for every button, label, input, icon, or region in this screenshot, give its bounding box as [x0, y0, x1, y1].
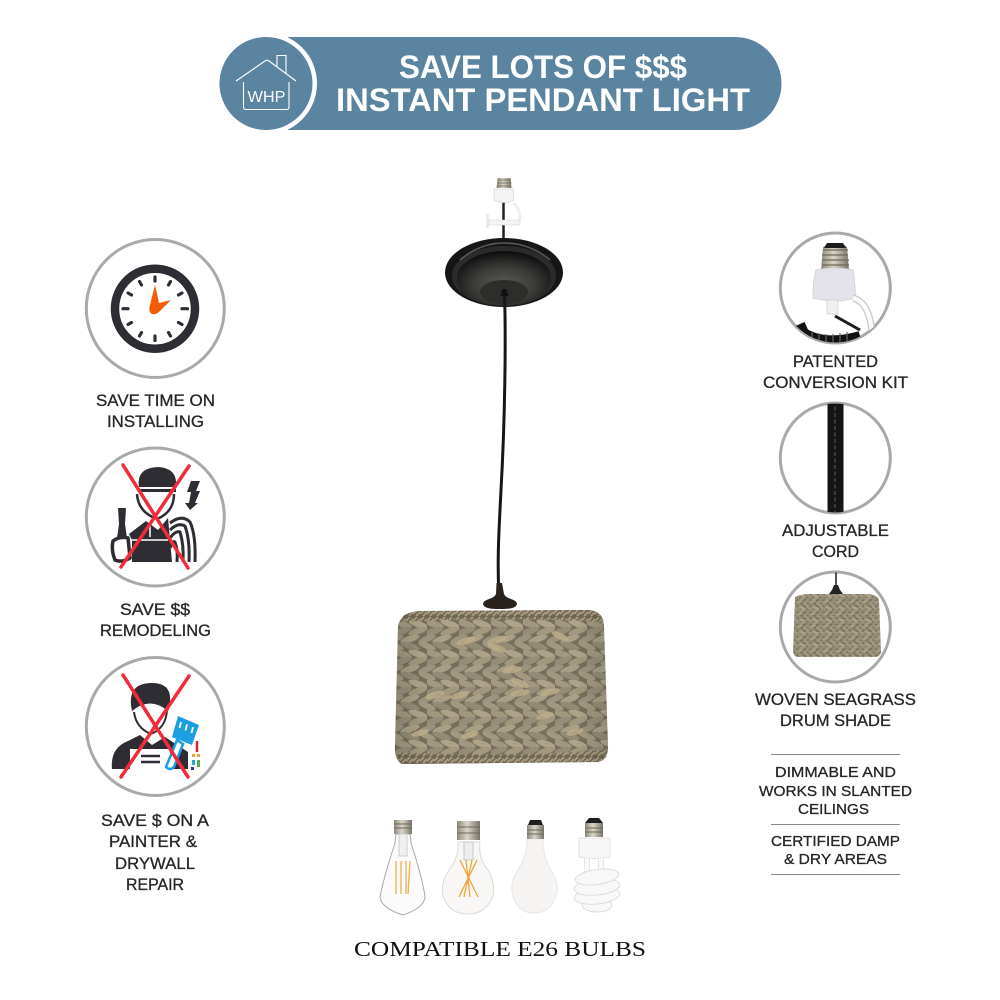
label: [100, 601, 211, 640]
bulb: A19 filament: [442, 821, 494, 914]
benefit: save time on installing: [86, 240, 224, 431]
label: SAVE $ ON A: [101, 812, 209, 830]
label: DRUM SHADE: [780, 712, 891, 730]
label: PAINTER &: [109, 833, 197, 851]
note: certified: CERTIFIED DAMP: [771, 833, 900, 850]
bulb: CFL spiral: [573, 818, 621, 912]
note: dimmable: CEILINGS: [798, 801, 869, 818]
note: dimmable: [759, 764, 912, 818]
label: CONVERSION KIT: [763, 374, 908, 392]
label: REMODELING: [100, 622, 211, 640]
note: certified: [771, 833, 900, 868]
note: dimmable: DIMMABLE AND: [775, 764, 896, 781]
photo: shade close-up: [780, 570, 890, 682]
feature notes: [759, 754, 912, 874]
label: [782, 522, 889, 561]
banner title: INSTANT PENDANT LIGHT: [336, 82, 750, 118]
label: SAVE $$: [120, 601, 190, 619]
benefit: save on remodeling: [86, 448, 224, 640]
benefit: save on painter and drywall repair: [86, 658, 224, 894]
ceiling canopy: [445, 238, 563, 307]
caption: compatible bulbs: COMPATIBLE E26 BULBS: [354, 937, 646, 961]
logo badge: WHP house: [215, 32, 317, 134]
label: [763, 353, 908, 392]
bulb: frosted A19: [512, 820, 557, 913]
label: SAVE TIME ON: [96, 392, 215, 410]
label: ADJUSTABLE: [782, 522, 889, 540]
bulb: ST filament: [380, 820, 425, 915]
feature: woven seagrass shade: [755, 570, 916, 730]
header banner: [215, 32, 782, 134]
label: [96, 392, 215, 431]
icon: crossed-out painter: [86, 658, 224, 796]
photo: conversion kit socket: [780, 233, 890, 347]
feature: adjustable cord: [780, 400, 890, 561]
banner title: SAVE LOTS OF $$$: [399, 49, 687, 85]
finial: [483, 583, 517, 609]
conversion socket: [488, 178, 520, 240]
icon: crossed-out electrician: [86, 448, 224, 586]
feature: conversion kit: [763, 233, 908, 392]
banner title: [336, 49, 750, 118]
logo badge: WHP house: WHP: [248, 89, 286, 106]
photo: cord close-up: [780, 400, 890, 516]
woven seagrass drum shade: [395, 610, 608, 764]
compatible bulbs row: [380, 818, 621, 915]
cord grommet: [500, 289, 508, 296]
label: INSTALLING: [107, 413, 204, 431]
pendant light product: [395, 178, 608, 764]
note: certified: & DRY AREAS: [784, 851, 887, 868]
label: CORD: [812, 543, 859, 561]
banner bar: [288, 37, 782, 130]
label: REPAIR: [126, 876, 184, 894]
label: PATENTED: [793, 353, 878, 371]
note: dimmable: WORKS IN SLANTED: [759, 783, 912, 800]
label: DRYWALL: [115, 855, 195, 873]
icon: clock: [86, 240, 224, 378]
label: [755, 691, 916, 730]
label: [101, 812, 209, 894]
hanging cord: [498, 292, 505, 596]
label: WOVEN SEAGRASS: [755, 691, 916, 709]
